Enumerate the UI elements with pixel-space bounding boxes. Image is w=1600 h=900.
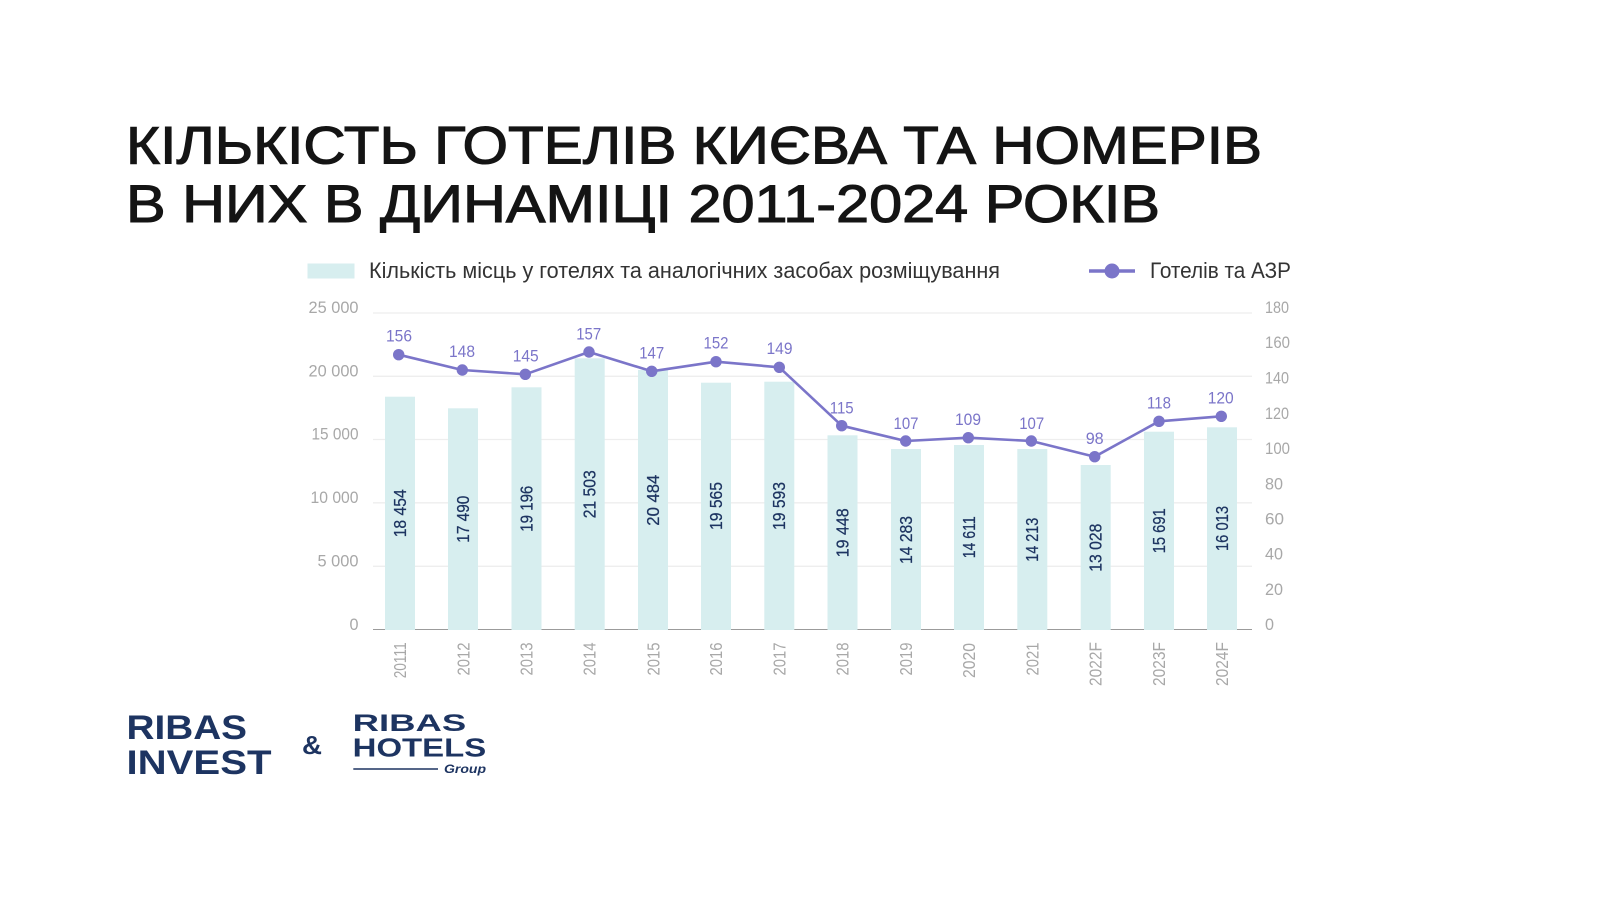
year labels: 2013: [517, 642, 537, 676]
right axis labels: 120: [1265, 404, 1289, 423]
left axis labels: 25 000: [308, 298, 358, 317]
year labels: 2017: [769, 642, 789, 676]
line value labels: 120: [1208, 390, 1234, 408]
left axis labels: [308, 298, 358, 634]
right axis labels: 160: [1265, 333, 1290, 352]
right axis labels: [1265, 298, 1290, 634]
bar value labels: 19 448: [832, 508, 852, 557]
year labels: [390, 642, 1232, 686]
line value labels: 98: [1086, 430, 1104, 448]
logo: Ribas Hotels Group: Group: [444, 764, 486, 776]
year labels: 2019: [896, 642, 916, 676]
right axis labels: 140: [1265, 368, 1289, 388]
logo: Ribas Hotels Group: HOTELS: [353, 735, 486, 763]
year labels: 2024F: [1212, 642, 1232, 686]
bar value labels: [390, 470, 1232, 572]
line value labels: 149: [766, 340, 792, 358]
bar value labels: 15 691: [1149, 508, 1169, 553]
bar value labels: 14 213: [1022, 518, 1042, 562]
line value labels: 157: [576, 325, 601, 343]
logo: Ribas Invest: RIBAS: [126, 709, 247, 747]
logo: Ribas Invest: INVEST: [126, 744, 272, 782]
left axis labels: 0: [350, 615, 358, 634]
right axis labels: 60: [1265, 510, 1284, 528]
right axis labels: 20: [1265, 580, 1283, 599]
year labels: 2012: [453, 642, 473, 676]
year labels: 2015: [643, 642, 663, 676]
year labels: 2022F: [1086, 642, 1106, 686]
right axis labels: 180: [1265, 298, 1289, 317]
legend: bar series: Кількість місць у готелях та аналогічних засобах розміщування: [369, 258, 1000, 283]
line value labels: 107: [1019, 415, 1044, 433]
line series: hotels: [393, 346, 1227, 462]
bar value labels: 17 490: [453, 495, 473, 543]
line value labels: 145: [513, 348, 539, 366]
year labels: 2014: [580, 642, 600, 676]
right axis labels: 100: [1265, 439, 1290, 458]
line value labels: 156: [386, 328, 412, 346]
combo chart: [308, 298, 1290, 686]
legend: line series: Готелів та АЗР: [1150, 258, 1291, 283]
bar value labels: 19 565: [706, 482, 726, 530]
line value labels: 147: [639, 344, 664, 362]
line value labels: 148: [449, 343, 475, 361]
logo: Ribas Hotels Group: [353, 710, 486, 776]
bar value labels: 18 454: [390, 489, 410, 537]
year labels: 2021: [1022, 642, 1042, 676]
bar value labels: 14 283: [896, 516, 916, 564]
right axis labels: 80: [1265, 474, 1283, 493]
ampersand: &: [302, 730, 322, 760]
year labels: 2018: [833, 642, 853, 676]
bar value labels: 13 028: [1086, 524, 1106, 572]
bar value labels: 19 593: [769, 482, 789, 530]
title: В НИХ В ДИНАМІЦІ 2011-2024 РОКІВ: [126, 175, 1160, 234]
year labels: 2020: [959, 643, 979, 678]
line value labels: [386, 325, 1234, 448]
line value labels: 152: [704, 335, 728, 353]
logo: Ribas Hotels Group: RIBAS: [353, 710, 466, 737]
bar value labels: 19 196: [516, 486, 536, 532]
year labels: 20111: [390, 642, 410, 678]
bar value labels: 14 611: [959, 516, 979, 558]
title: [126, 116, 1262, 234]
bar value labels: 16 013: [1212, 506, 1232, 551]
line value labels: 115: [830, 399, 854, 417]
title: КІЛЬКІСТЬ ГОТЕЛІВ КИЄВА ТА НОМЕРІВ: [126, 116, 1262, 176]
left axis labels: 20 000: [308, 361, 358, 380]
legend: line series: [1089, 258, 1291, 283]
line value labels: 109: [955, 411, 981, 429]
right axis labels: 0: [1265, 615, 1274, 634]
bars: hotel places: [385, 358, 1237, 630]
year labels: 2016: [706, 642, 726, 676]
left axis labels: 10 000: [310, 488, 358, 507]
bar value labels: 21 503: [580, 470, 600, 518]
bar value labels: 20 484: [643, 474, 663, 526]
line value labels: 118: [1147, 394, 1171, 412]
logo: Ribas Invest: [126, 709, 272, 782]
legend: [308, 258, 1291, 283]
left axis labels: 15 000: [312, 425, 358, 444]
right axis labels: 40: [1265, 545, 1283, 564]
left axis labels: 5 000: [318, 551, 358, 570]
line value labels: 107: [894, 415, 918, 433]
year labels: 2023F: [1149, 642, 1169, 686]
